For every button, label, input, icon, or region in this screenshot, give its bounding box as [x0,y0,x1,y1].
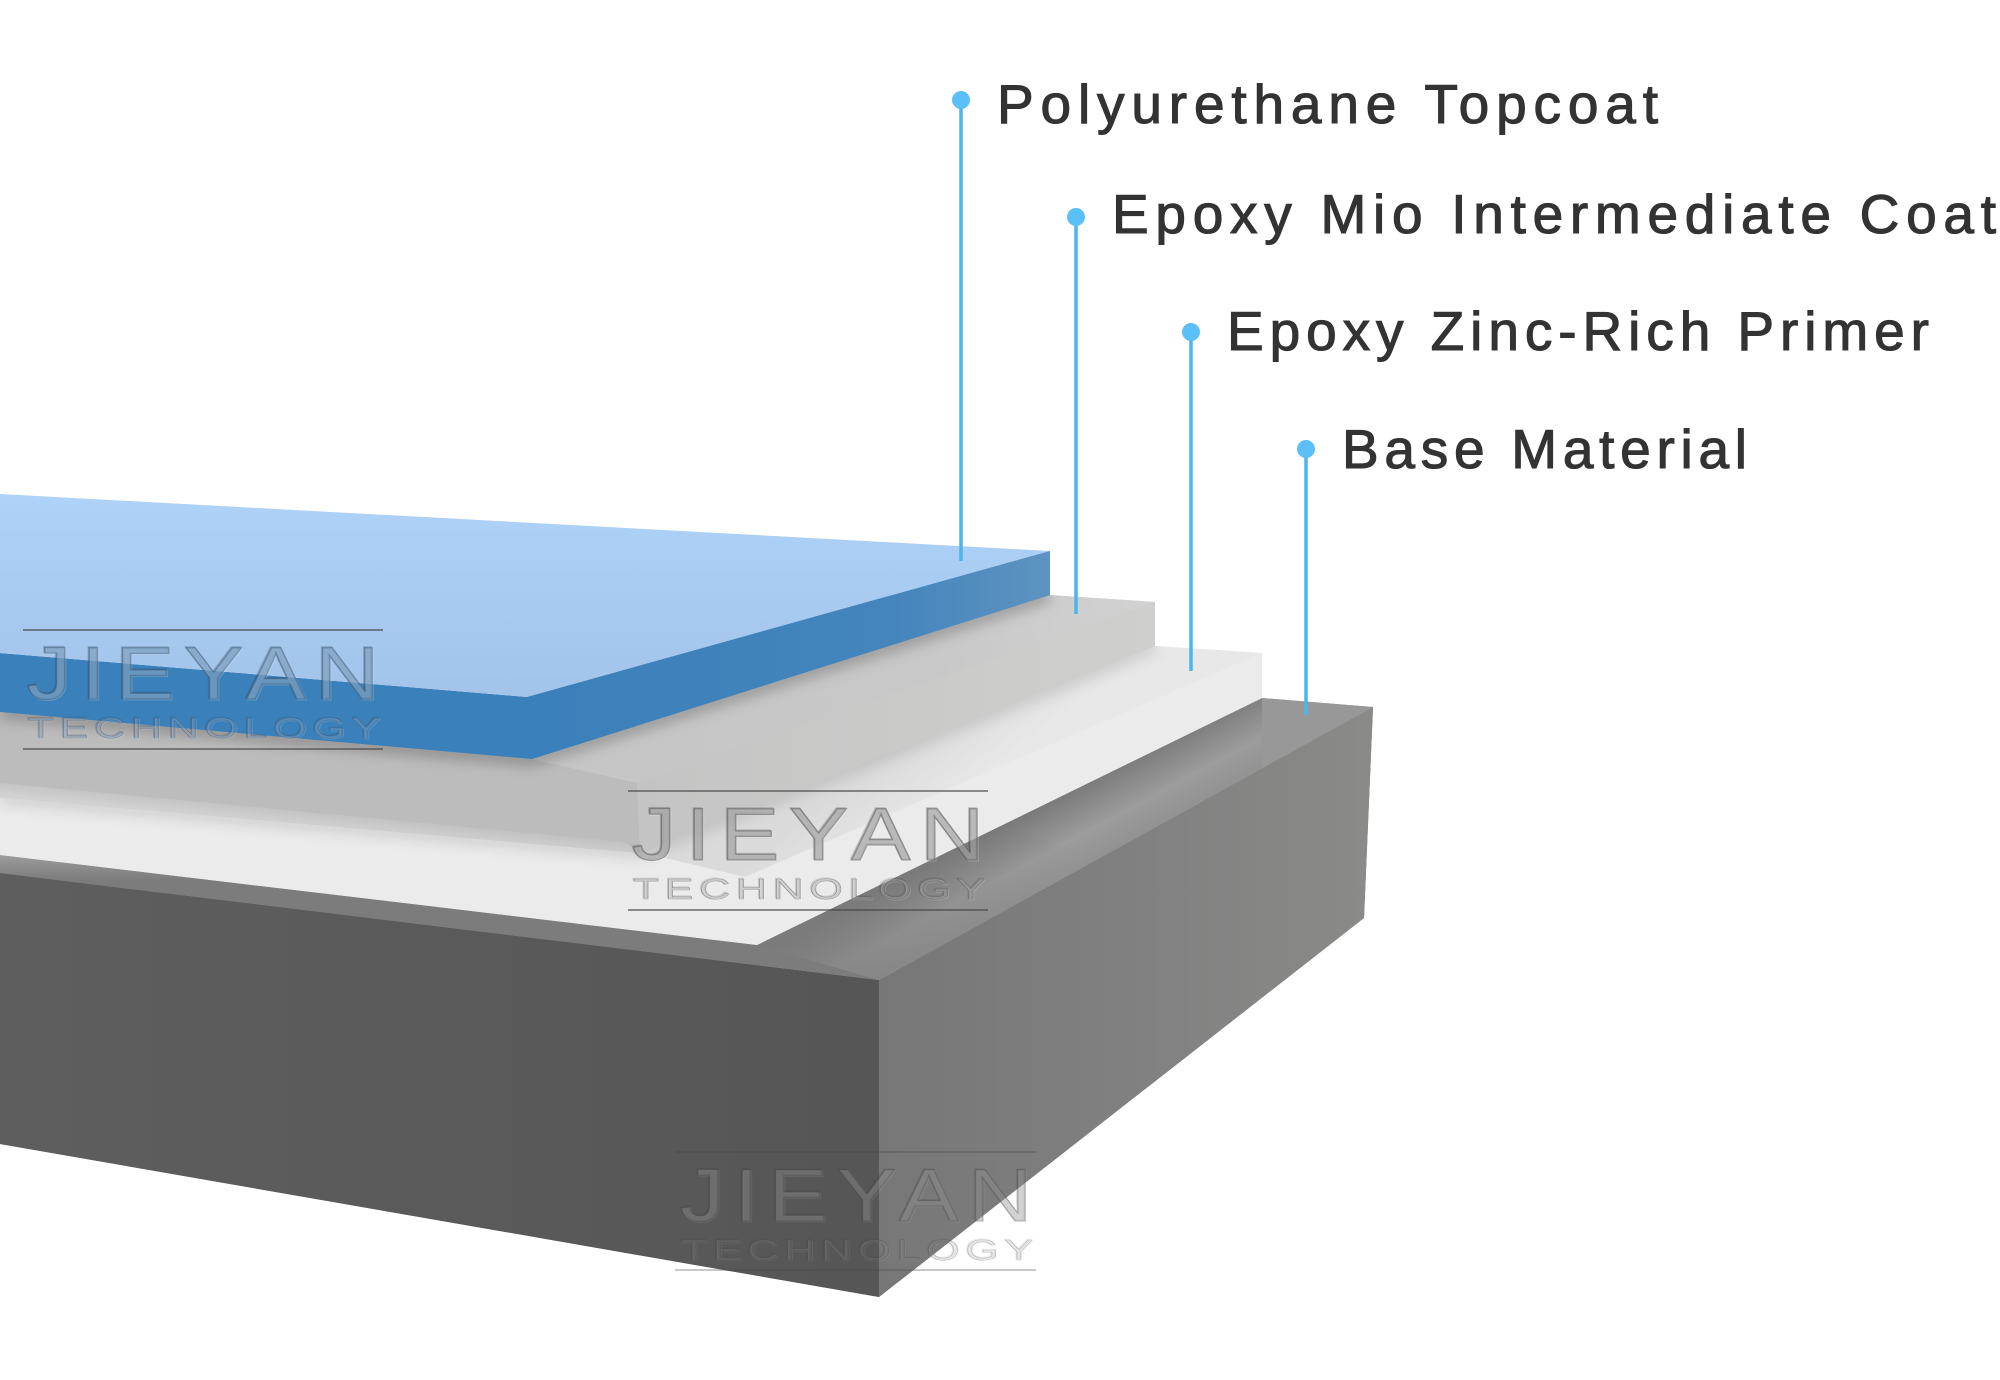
watermark: centre: JIEYAN [632,793,994,876]
callout: epoxy zinc-rich primer: Epoxy Zinc-Rich Primer [1227,300,1929,362]
callout: polyurethane topcoat: Polyurethane Topcoat [997,73,1658,135]
callout: epoxy zinc-rich primer [1182,300,1929,671]
watermark: left: TECHNOLOGY [28,713,386,745]
epoxy zinc-rich primer layer [0,646,1262,945]
polyurethane topcoat layer [0,494,1050,759]
watermark: bottom: JIEYAN [680,1154,1042,1237]
watermark: bottom: TECHNOLOGY [681,1235,1039,1267]
callout: base material: Base Material [1342,418,1747,480]
watermark: left [23,630,389,749]
callout: epoxy mio intermediate coat [1067,183,1996,614]
watermark: centre: TECHNOLOGY [633,874,991,906]
watermark: left: JIEYAN [27,632,389,715]
callout: base material [1297,418,1747,715]
callout: epoxy mio intermediate coat: Epoxy Mio Intermediate Coat [1112,183,1996,245]
watermark: bottom [675,1152,1042,1270]
base material block [0,698,1373,1297]
callout: polyurethane topcoat [952,73,1658,561]
epoxy mio intermediate layer [0,595,1155,853]
watermark: centre [628,791,994,910]
